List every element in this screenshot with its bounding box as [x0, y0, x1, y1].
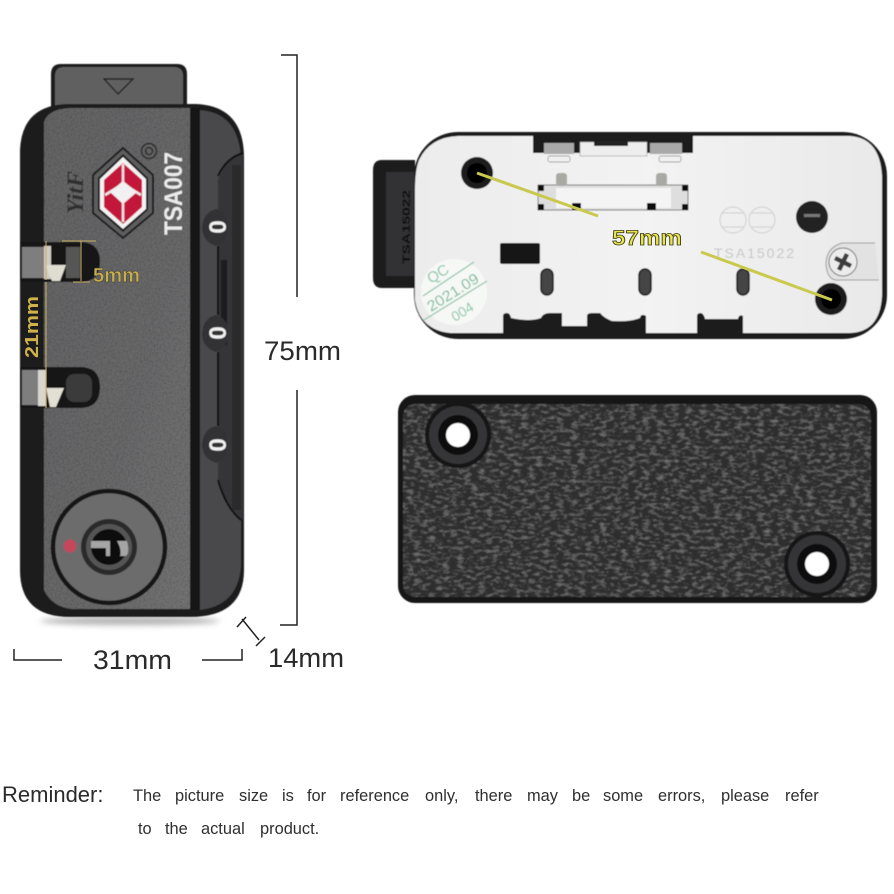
reminder text line 1: please [721, 787, 769, 805]
reminder text line 2: the [165, 820, 188, 838]
red indicator dot [64, 540, 76, 552]
reminder text line 1: size [239, 787, 268, 805]
reminder text line 1: The [133, 787, 161, 805]
back slider tab [373, 160, 415, 288]
grommet right [784, 531, 850, 597]
brand mark: YitF [63, 171, 88, 214]
57mm measurement line, left [477, 173, 598, 216]
oval slots [541, 269, 749, 295]
mounting hole right [815, 283, 847, 315]
reminder text line 1: be [572, 787, 590, 805]
reminder text line 1: some [603, 787, 643, 805]
5mm dimension: 5mm [93, 265, 140, 287]
grommet left [425, 402, 491, 468]
21mm dimension: 21mm [22, 296, 42, 358]
QC sticker: 004 [448, 298, 477, 325]
reminder text line 2: to [138, 820, 152, 838]
wheel digit: 0 [205, 438, 232, 452]
width dimension line [14, 649, 242, 660]
57mm measurement line, right [701, 252, 832, 300]
right side panel [199, 110, 241, 610]
registered mark [142, 144, 156, 158]
slider tab with arrow [51, 64, 187, 108]
wheel digit: 0 [205, 326, 232, 340]
reminder text line 1: is [282, 787, 294, 805]
reminder text line 1: only, [425, 787, 458, 805]
mounting hole left [461, 157, 493, 189]
plate body [398, 395, 877, 603]
reminder text line 2: product. [260, 820, 319, 838]
reminder text line 1: for [307, 787, 327, 805]
silver plate [415, 136, 882, 333]
reminder text line 1: errors, [658, 787, 705, 805]
model name: TSA007 [160, 152, 188, 235]
combination wheels [202, 153, 243, 520]
lock body [20, 104, 244, 617]
lock shadow [40, 617, 220, 625]
leather surface [403, 404, 871, 597]
back slider tab: TSA15022 [401, 190, 413, 264]
embossed part number: TSA15022 [714, 245, 794, 261]
width label: 31mm [93, 645, 172, 675]
leather back plate [398, 395, 877, 603]
bottom notches [503, 313, 743, 335]
QC sticker: 2021.09 [424, 270, 482, 315]
lock front view [20, 64, 244, 625]
reminder text line 1: there [475, 787, 512, 805]
QC sticker [421, 259, 487, 325]
height dimension line [280, 55, 297, 625]
grey face panel [44, 108, 190, 609]
57mm label: 57mm [612, 227, 682, 250]
corner bracket and Phillips screw [826, 243, 879, 280]
embossed logo [720, 207, 775, 233]
depth label: 14mm [268, 643, 344, 673]
QC sticker: QC [424, 261, 452, 287]
TSA logo [93, 148, 153, 238]
reminder text line 1: may [527, 787, 559, 805]
5mm dimension [46, 241, 140, 287]
wheel digit: 0 [205, 220, 232, 234]
reminder text line 1: refer [785, 787, 819, 805]
top notch [533, 133, 693, 162]
reminder heading: Reminder: [2, 782, 103, 807]
center slider window [538, 173, 688, 210]
reminder text line 1: reference [340, 787, 409, 805]
key cylinder [53, 491, 165, 603]
upper slot [20, 242, 100, 282]
reminder text line 2: actual [201, 820, 245, 838]
reminder text line 1: picture [175, 787, 224, 805]
21mm dimension [22, 282, 46, 408]
lower slot [20, 367, 100, 408]
back housing [414, 132, 887, 339]
depth dimension line [237, 617, 265, 646]
slotted screw [796, 201, 828, 233]
rectangular opening [500, 243, 540, 264]
height label: 75mm [264, 336, 341, 366]
lock back view [373, 132, 887, 339]
